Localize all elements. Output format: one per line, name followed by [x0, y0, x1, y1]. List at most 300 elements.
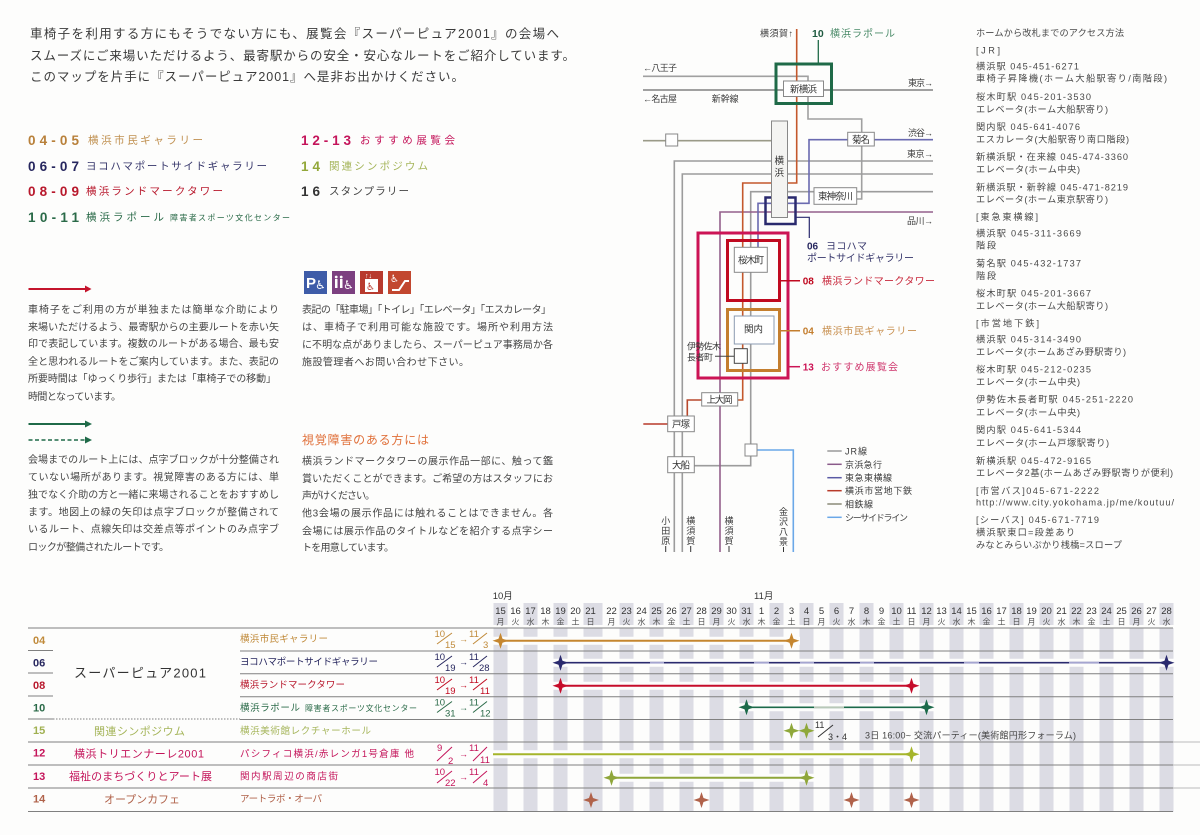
date: 9/2 to 11/11: → — [459, 749, 468, 759]
calendar: day header: 水 — [742, 616, 750, 626]
map legend: 東急東横線 — [845, 472, 892, 483]
calendar: day header: 木 — [652, 616, 660, 626]
calendar: day header: 23 — [1086, 606, 1097, 617]
text block: braille block note — [28, 453, 279, 554]
calendar: day header: 月 — [712, 618, 720, 626]
access info column: 横浜駅東口=段差あり — [976, 526, 1075, 538]
access info column: 階段 — [976, 240, 996, 250]
venue box: 08 Landmark Tower — [728, 240, 800, 300]
access info column: みなとみらいぷかり桟橋=スロープ — [976, 539, 1123, 550]
map labels: directions: 新幹線 — [712, 93, 739, 104]
table: exhibition names: 横浜トリエンナーレ2001 — [74, 746, 204, 760]
intro text: このマップを片手に『スーパーピュア2001』へ是非お出かけください。 — [30, 70, 464, 84]
calendar: day header: 水 — [526, 616, 534, 626]
date: 10/22 to 11/4: 4 — [483, 778, 488, 789]
bar: 12 triennale — [493, 746, 920, 762]
station: Isezakichojamachi: 長者町 — [687, 352, 713, 362]
icon: parking: P — [306, 275, 316, 292]
date: 10/19 to 11/28: 19 — [445, 663, 456, 674]
text block: visual impairment note: 横浜ランドマークタワーの展示作品一部に、触って鑑 — [302, 454, 553, 468]
date note: symposium — [815, 720, 1076, 742]
table: page numbers: 12 — [33, 748, 45, 760]
calendar: day header: 3 — [789, 606, 794, 617]
index: 08-09 — [28, 184, 223, 199]
heading: visual impairment: 視覚障害のある方には — [302, 432, 429, 447]
table: page numbers: 04 — [33, 635, 46, 647]
access info column: 菊名駅 045-432-1737 — [976, 258, 1081, 268]
access info column: 新横浜駅 045-472-9165 — [976, 455, 1091, 466]
calendar: day header: 2 — [774, 606, 779, 617]
text block: route explanation: 車椅子をご利用の方が単独または簡単な介助により — [28, 303, 279, 316]
map label: 10: 横浜ラポール — [830, 27, 895, 40]
table: page numbers: 15 — [33, 725, 45, 737]
text block: braille block note: 会場までのルート上には、点字ブロックが十分整備され — [28, 453, 279, 466]
date: 10/19 to 11/28: 11 — [469, 652, 479, 663]
station: Isezakichojamachi: 伊勢佐木 — [687, 340, 721, 352]
calendar: day header: 24 — [636, 606, 647, 617]
access info column: エレベータ2基(ホームあざみ野駅寄りが便利) — [976, 467, 1173, 478]
calendar: day header: 日 — [698, 618, 706, 626]
calendar: day header: 火 — [728, 618, 736, 626]
index: 10-11: 横浜ラポール — [86, 210, 164, 224]
station: Totsuka — [668, 416, 694, 432]
calendar: day header: 土 — [1102, 616, 1110, 626]
index: 08-09: 08-09 — [28, 184, 79, 199]
station: Yokohama: 浜 — [774, 168, 784, 179]
station: Ofuna: 大船 — [672, 460, 690, 472]
calendar: day header: 10 — [891, 606, 902, 617]
calendar: day header: 12 — [921, 606, 932, 617]
access info column: http://www.city.yokohama.jp/me/koutuu/ — [976, 498, 1174, 508]
index: 04-05: 横浜市民ギャラリー — [88, 134, 203, 146]
date: 10/31 to 11/12: 10 — [434, 698, 445, 708]
station: Yokohama: 横 — [774, 155, 784, 167]
station: Ofuna — [668, 457, 694, 473]
date: 10/19 to 11/11: → — [459, 680, 468, 690]
calendar: day header: 火 — [1042, 618, 1050, 626]
calendar: day header: 31 — [741, 606, 752, 617]
station: Kami-Ooka — [702, 393, 738, 406]
calendar: day header: 日 — [1012, 618, 1020, 626]
table: venues: 障害者スポーツ文化センター — [305, 703, 417, 713]
index: 16: 16 — [301, 184, 320, 199]
map labels: southern directions — [661, 506, 788, 552]
text block: visual impairment note: 賞いただくことができます。ご希望の方はスタッフにお — [302, 472, 553, 485]
table: venues: アートラボ・オーパ — [240, 794, 322, 805]
table: page numbers — [33, 635, 46, 805]
table: venues: 横浜美術館レクチャーホール — [240, 725, 371, 737]
map: gray rail lines — [643, 76, 933, 552]
calendar: day header: 5 — [819, 606, 824, 617]
venue box: 10 Yokohama Rapport — [776, 40, 832, 104]
date: 10/31 to 11/12: 31 — [445, 708, 456, 720]
table: exhibition names: オープンカフェ — [104, 793, 180, 806]
schedule calendar grid — [493, 591, 1174, 812]
map: municipal subway — [737, 29, 797, 400]
calendar: day header: 月 — [922, 618, 930, 626]
text block: braille block note: ます。地図上の緑の矢印は点字ブロックが整備されて — [28, 506, 279, 518]
access info column: エレベータ(ホーム東京駅寄り) — [976, 194, 1108, 204]
map legend: 京浜急行 — [845, 459, 882, 470]
calendar: white gaps around bars — [493, 626, 1174, 778]
icon: parking — [304, 271, 327, 294]
calendar: day header: 月 — [818, 618, 826, 626]
text block: facilities note: は、車椅子で利用可能な施設です。場所や利用方法 — [302, 320, 553, 334]
calendar: day header: 木 — [968, 616, 976, 626]
calendar: day header: 金 — [982, 616, 990, 626]
icon: toilet: ♿ — [343, 278, 354, 292]
calendar: month labels: 10月 — [493, 591, 513, 602]
table: venues — [240, 633, 417, 805]
calendar: day header: 金 — [772, 616, 780, 626]
access info column — [976, 27, 1174, 550]
bar: 04 citizen gallery — [492, 633, 800, 649]
index: 10-11: 10-11 — [28, 210, 79, 225]
route map — [643, 27, 935, 552]
calendar: day header: 28 — [1161, 606, 1172, 617]
arrows: green braille routes — [28, 420, 92, 444]
access info column: [シーバス] 045-671-7719 — [976, 515, 1099, 525]
arrow: red main route — [28, 286, 92, 292]
map labels: southern directions: 八 — [779, 527, 788, 537]
station: Kami-Ooka: 上大岡 — [706, 394, 732, 406]
map labels: southern directions: 金 — [779, 506, 788, 517]
calendar: day header: 火 — [832, 618, 840, 626]
date: 10/15 to 11/3: 10 — [434, 629, 445, 640]
table rules — [28, 628, 1200, 812]
calendar: day header: 21 — [585, 606, 596, 617]
map labels: southern directions: 田 — [661, 526, 670, 536]
access info column: [市営地下鉄] — [976, 318, 1039, 328]
access info column: 桜木町駅 045-212-0235 — [976, 364, 1091, 374]
text block: braille block note: ロックが整備されたルートです。 — [28, 540, 169, 554]
date: 10/15 to 11/3 — [434, 629, 488, 651]
map labels: southern directions: 須 — [724, 526, 734, 536]
calendar: day header: 水 — [1058, 616, 1066, 626]
map labels: southern directions: 小 — [661, 516, 670, 526]
date: 9/2 to 11/11: 2 — [448, 756, 453, 767]
date: 10/22 to 11/4 — [434, 767, 488, 789]
map: subway south — [687, 400, 702, 417]
bar: 10 rapport — [738, 699, 934, 715]
calendar: shaded day columns — [494, 603, 1174, 812]
date: 10/19 to 11/28: 28 — [479, 663, 490, 674]
map labels: southern directions: 賀 — [724, 535, 734, 546]
station: Totsuka: 戸塚 — [672, 420, 690, 430]
map: subway west — [643, 423, 668, 425]
index: 06-07: ヨコハマポートサイドギャラリー — [86, 160, 267, 172]
calendar: day header: 火 — [622, 618, 630, 626]
date note: symposium: 11 — [815, 720, 824, 730]
station: Shin-Yokohama — [784, 81, 824, 96]
table: venues: 関内駅周辺の商店街 — [240, 770, 338, 782]
calendar: day header: 金 — [556, 616, 564, 626]
access info column: [市営バス]045-671-2222 — [976, 485, 1099, 496]
calendar: day header: 火 — [938, 618, 946, 626]
station: Higashi-Kanagawa: 東神奈川 — [818, 190, 853, 202]
date: 10/19 to 11/28: → — [459, 657, 468, 667]
text block: visual impairment note: 会場には展示作品のタイトルなどを紹介する点字シー — [302, 524, 553, 538]
icon: elevator — [360, 271, 383, 294]
calendar: day header: 16 — [981, 606, 992, 617]
access info column: 階段 — [976, 270, 996, 281]
index: 14: 関連シンポジウム — [329, 160, 428, 172]
calendar: day header: 金 — [878, 616, 886, 626]
index: 12-13 — [301, 133, 456, 148]
station: Kikuna — [848, 132, 874, 146]
calendar: day header: 日 — [908, 618, 916, 626]
date: 10/15 to 11/3: 15 — [445, 640, 456, 651]
calendar: day header: 18 — [1011, 606, 1022, 617]
station: Sakuragicho — [734, 247, 767, 272]
date: 10/15 to 11/3: → — [459, 634, 468, 644]
table: page numbers: 08 — [33, 680, 45, 692]
access info column: エレベータ(ホーム大船駅寄り) — [976, 104, 1108, 114]
date: 10/22 to 11/4: 11 — [469, 767, 479, 778]
calendar: day header: 月 — [1028, 618, 1036, 626]
venue box: 06 Yokohama Portside — [766, 198, 809, 238]
map labels: southern directions: 須 — [686, 526, 695, 536]
date: 10/22 to 11/4: → — [459, 772, 468, 782]
text block: facilities note: に不明な点がありましたら、スーパーピュア事務局か各 — [302, 338, 553, 351]
index: 08-09: 横浜ランドマークタワー — [86, 184, 223, 198]
access info column: 桜木町駅 045-201-3667 — [976, 288, 1091, 298]
table: venues: 横浜ランドマークタワー — [240, 679, 345, 691]
map labels: southern directions: 沢 — [779, 516, 788, 527]
table: venues: ヨコハマポートサイドギャラリー — [240, 657, 378, 668]
calendar: day header: 土 — [572, 616, 580, 626]
map labels: directions: 横須賀↑ — [760, 28, 793, 38]
text block: route explanation: 来場いただけるよう、最寄駅からの主要ルートを赤い矢 — [28, 320, 279, 334]
calendar: day header: 21 — [1056, 606, 1067, 617]
calendar: day header: 火 — [512, 618, 520, 626]
index: 06-07 — [28, 159, 267, 174]
calendar: day header: 29 — [711, 606, 722, 617]
calendar: day header: 木 — [862, 616, 870, 626]
text block: route explanation: 時間となっています。 — [28, 391, 121, 403]
map labels: directions: 品川→ — [907, 216, 933, 226]
access info column: エレベータ(ホーム大船駅寄り) — [976, 300, 1108, 311]
station: small box Shin-Sugita — [745, 444, 757, 456]
map label: 10: 10 — [812, 28, 824, 40]
text block: facilities note — [302, 303, 553, 368]
date: 10/19 to 11/11: 11 — [469, 675, 479, 686]
map labels: southern directions: 横 — [686, 515, 695, 526]
table: exhibition names — [69, 666, 212, 806]
access info column: 車椅子昇降機(ホーム大船駅寄り/南階段) — [976, 72, 1167, 84]
calendar: day header: 金 — [1088, 616, 1096, 626]
intro text: スムーズにご来場いただけるよう、最寄駅からの安全・安心なルートをご紹介しています。 — [30, 48, 575, 63]
calendar: day header: 11 — [907, 606, 916, 617]
calendar: day header: 火 — [1148, 618, 1156, 626]
calendar: day header: 19 — [555, 606, 566, 617]
calendar: day header: 15 — [495, 606, 506, 617]
table: exhibition names: スーパーピュア2001 — [74, 666, 206, 680]
text block: route explanation — [28, 303, 279, 403]
bar: 13 welfare town — [604, 770, 814, 786]
text block: braille block note: ていない場所があります。視覚障害のある方には、単 — [28, 470, 279, 484]
access info column: 横浜駅 045-311-3669 — [976, 228, 1081, 238]
calendar: day header: 23 — [621, 606, 632, 617]
text block: visual impairment note: トを用意しています。 — [302, 542, 394, 554]
date: 10/15 to 11/3: 3 — [483, 640, 488, 651]
calendar: day header: 月 — [1132, 618, 1140, 626]
station: Isezakichojamachi — [687, 340, 747, 363]
calendar: day header: 4 — [804, 606, 809, 617]
index: 10-11 — [28, 210, 290, 225]
map label: 06: ヨコハマ — [826, 242, 867, 252]
text block: braille block note: 独でなく介助の方と一緒に来場されることをおすすめし — [28, 488, 279, 501]
table: page numbers: 06 — [33, 658, 45, 670]
icon: parking: ♿ — [315, 278, 326, 292]
station: Kikuna: 菊名 — [852, 134, 870, 146]
calendar: day header: 26 — [1131, 606, 1142, 617]
map labels: southern directions: 景 — [779, 537, 788, 547]
calendar: day header: 日 — [1118, 618, 1126, 626]
date: 10/31 to 11/12: 11 — [469, 698, 479, 708]
date: 10/22 to 11/4: 22 — [445, 778, 456, 789]
calendar: day header: 土 — [998, 616, 1006, 626]
map label: 08: 横浜ランドマークタワー — [822, 274, 935, 288]
date: 9/2 to 11/11: 11 — [469, 743, 479, 754]
calendar: day header: 17 — [996, 606, 1007, 617]
index: 12-13: 12-13 — [301, 133, 351, 148]
access info column: エスカレータ(大船駅寄り南口階段) — [976, 134, 1129, 144]
index: 06-07: 06-07 — [28, 159, 79, 174]
index: 04-05: 04-05 — [28, 133, 79, 148]
date: 10/22 to 11/4: 10 — [434, 767, 445, 778]
map legend: 横浜市営地下鉄 — [845, 485, 912, 496]
calendar: day header: 6 — [834, 606, 839, 617]
calendar: day header: 土 — [892, 616, 900, 626]
text block: braille block note: いるルート、点線矢印は交差点等ポイントのみ点字ブ — [28, 522, 279, 536]
icon: elevator: ♿ — [366, 282, 375, 293]
access info column: [東急東横線] — [976, 211, 1038, 222]
map: Toyoko line — [758, 140, 933, 248]
date: 10/19 to 11/11 — [434, 675, 490, 697]
icons: accessible facilities — [304, 271, 411, 294]
calendar: day header: 7 — [849, 606, 854, 617]
station: Yokohama — [772, 121, 788, 218]
date note: symposium: 3・4 — [828, 732, 847, 742]
calendar: day header: 15 — [966, 606, 977, 617]
calendar: day header: 土 — [788, 616, 796, 626]
access info column: [JR] — [976, 46, 1000, 56]
date: 9/2 to 11/11: 11 — [480, 755, 490, 766]
access info column: エレベータ(ホーム中央) — [976, 164, 1080, 174]
bar: 06 portside gallery — [552, 655, 1174, 671]
calendar: day header: 8 — [864, 606, 869, 617]
map: seaside line — [757, 450, 793, 552]
calendar: day header — [495, 606, 1172, 626]
map legend: JR線 — [845, 446, 867, 456]
station: small box on Sotetsu — [666, 134, 678, 146]
table: exhibition names: 関連シンポジウム — [94, 724, 185, 738]
date: 10/19 to 11/11: 10 — [434, 675, 445, 686]
date: 10/19 to 11/28 — [434, 652, 490, 674]
index: 12-13: おすすめ展覧会 — [360, 134, 456, 146]
calendar: day header: 1 — [759, 606, 764, 617]
map label: 06 — [807, 242, 914, 264]
map labels: directions: 東京→ — [907, 148, 933, 159]
page index legend — [28, 133, 456, 225]
access info column: エレベータ(ホーム中央) — [976, 376, 1080, 387]
map label: 04: 横浜市民ギャラリー — [822, 324, 917, 338]
access info column: エレベータ(ホーム戸塚駅寄り) — [976, 437, 1109, 448]
station: Shin-Yokohama: 新横浜 — [790, 84, 817, 96]
date note: symposium: 3日 16:00~ 交流パーティー(美術館円形フォーラム) — [865, 730, 1076, 740]
map labels: directions: ←名古屋 — [643, 93, 677, 104]
table: page numbers: 13 — [33, 771, 45, 783]
map labels: southern directions: 原 — [661, 536, 670, 546]
calendar: day header: 9 — [879, 606, 884, 617]
map legend: 相鉄線 — [845, 498, 873, 510]
calendar: day header: 25 — [651, 606, 662, 617]
access info column: 新横浜駅・在来線 045-474-3360 — [976, 151, 1128, 162]
access info column: 関内駅 045-641-4076 — [976, 121, 1080, 132]
text block: facilities note: 施設管理者へお問い合わせ下さい。 — [302, 356, 469, 368]
access info column: 横浜駅 045-451-6271 — [976, 60, 1079, 72]
map labels: directions — [643, 28, 933, 226]
markers: 14 open cafe — [583, 792, 920, 808]
calendar: day header: 日 — [586, 618, 594, 626]
index: 04-05 — [28, 133, 203, 148]
map label: 13: おすすめ展覧会 — [821, 360, 898, 374]
station: Kannai: 関内 — [744, 324, 763, 336]
text block: visual impairment note — [302, 454, 553, 554]
table: page numbers: 10 — [33, 702, 45, 714]
calendar: day header: 14 — [951, 606, 962, 617]
text block: visual impairment note: 他3会場の展示作品には触れることはできません。各 — [302, 506, 553, 520]
date: 10/19 to 11/11: 19 — [445, 686, 456, 697]
intro text — [30, 26, 575, 84]
map labels: southern directions: 横 — [724, 515, 734, 526]
venue box: 04 citizen gallery — [728, 310, 800, 370]
calendar: day header: 20 — [570, 606, 581, 617]
access info column: エレベータ(ホーム中央) — [976, 406, 1080, 418]
table: exhibition names: 福祉のまちづくりとアート展 — [69, 769, 212, 783]
map label: 13: 13 — [803, 362, 814, 374]
text block: route explanation: 印で表記しています。複数のルートがある場合、最も安 — [28, 337, 279, 350]
map: Keikyu line — [720, 212, 933, 552]
text block: route explanation: 全と思われるルートをご案内しています。また、表記の — [28, 355, 279, 368]
text block: route explanation: 所要時間は「ゆっくり歩行」または「車椅子での移動」 — [28, 372, 276, 385]
calendar: day header: 27 — [1146, 606, 1157, 617]
map label: 10 — [812, 27, 895, 40]
index: 14 — [301, 159, 428, 174]
date: 9/2 to 11/11 — [437, 743, 490, 767]
calendar: day header: 月 — [608, 618, 616, 626]
bar: 08 landmark tower — [552, 678, 920, 694]
calendar: day header: 16 — [510, 606, 521, 617]
map legend: シーサイドライン — [845, 513, 908, 523]
icon: elevator: ↑↓ — [365, 273, 372, 280]
text block: visual impairment note: 声がけください。 — [302, 489, 375, 502]
calendar: day header: 木 — [542, 616, 550, 626]
index: 10-11: 障害者スポーツ文化センター — [170, 212, 290, 222]
date: 10/19 to 11/11: 11 — [480, 686, 490, 697]
map labels: directions: 東京→ — [908, 77, 933, 88]
table: venues: 横浜市民ギャラリー — [240, 633, 328, 645]
map label: 04: 04 — [803, 326, 814, 338]
calendar: day header: 19 — [1026, 606, 1037, 617]
calendar: month labels — [493, 591, 773, 602]
map legend — [827, 446, 912, 523]
table: page numbers: 14 — [33, 793, 46, 805]
station: Sakuragicho: 桜木町 — [738, 254, 764, 266]
calendar: month labels: 11月 — [754, 591, 773, 602]
access info column: 関内駅 045-641-5344 — [976, 424, 1081, 435]
